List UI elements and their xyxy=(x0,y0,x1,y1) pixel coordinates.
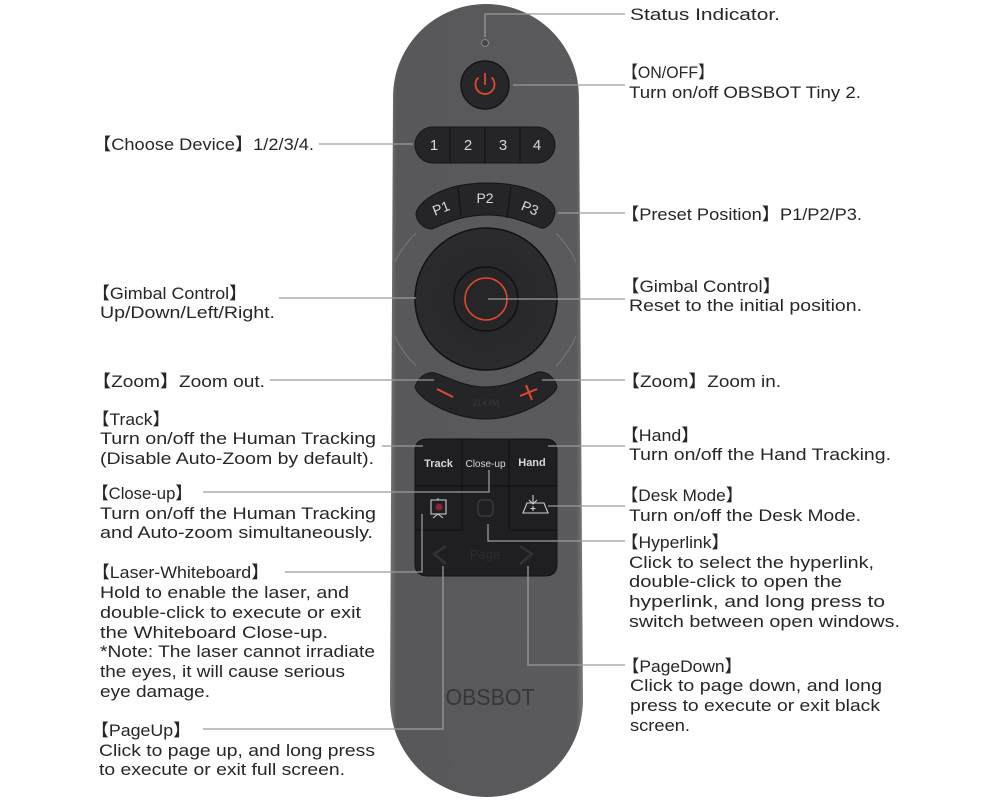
gimbal reset label: Reset to the initial position. xyxy=(629,296,862,315)
laser whiteboard label: eye damage. xyxy=(100,682,210,701)
status indicator light xyxy=(482,40,488,46)
page down label xyxy=(622,657,882,735)
laser whiteboard label xyxy=(92,563,375,701)
hyperlink label: Click to select the hyperlink, xyxy=(629,553,874,572)
desk mode label: Turn on/off the Desk Mode. xyxy=(629,506,861,525)
desk mode label: 【Desk Mode】 xyxy=(621,486,743,505)
zoom rocker xyxy=(415,372,557,419)
hyperlink label: double-click to open the xyxy=(629,572,842,591)
icon: whiteboard xyxy=(431,498,446,518)
page chevrons xyxy=(434,546,532,564)
gimbal reset button xyxy=(454,267,518,331)
laser whiteboard label: *Note: The laser cannot irradiate xyxy=(100,642,375,661)
gimbal reset label xyxy=(621,277,862,315)
close-up label: 【Close-up】 xyxy=(92,484,192,503)
function button panel: Hand xyxy=(518,457,546,469)
preset buttons P1 P2 P3: P2 xyxy=(476,190,494,206)
gimbal directions label: 【Gimbal Control】 xyxy=(92,284,247,303)
page up label: Click to page up, and long press xyxy=(99,741,375,760)
OBSBOT logo: OBSBOT xyxy=(446,684,534,710)
hand label: Turn on/off the Hand Tracking. xyxy=(629,445,891,464)
choose device label: 【Choose Device】1/2/3/4. xyxy=(93,135,314,154)
preset position label: 【Preset Position】P1/P2/P3. xyxy=(621,205,862,224)
gimbal outer ring xyxy=(395,233,576,366)
device buttons 1-4: 2 xyxy=(464,137,472,154)
device buttons 1-4 xyxy=(415,127,555,163)
function button panel: Track xyxy=(424,458,454,470)
page up label: 【PageUp】 xyxy=(91,721,191,740)
gimbal directions label: Up/Down/Left/Right. xyxy=(100,303,275,322)
icon: hyperlink xyxy=(478,500,493,516)
page down label: 【PageDown】 xyxy=(622,657,742,676)
zoom out label: 【Zoom】Zoom out. xyxy=(92,372,265,391)
gimbal control pad xyxy=(415,228,557,370)
page down label: Click to page down, and long xyxy=(630,676,882,695)
function button panel: Close-up xyxy=(465,459,506,470)
close-up label: Turn on/off the Human Tracking xyxy=(100,504,376,523)
remote control body xyxy=(390,4,583,797)
on/off label xyxy=(622,63,861,102)
laser whiteboard label: the eyes, it will cause serious xyxy=(100,662,345,681)
power button xyxy=(461,61,509,109)
device buttons 1-4: 3 xyxy=(499,137,507,154)
track label: 【Track】 xyxy=(92,410,170,429)
track label: Turn on/off the Human Tracking xyxy=(100,429,376,448)
page down label: press to execute or exit black xyxy=(630,696,881,715)
laser whiteboard label: Hold to enable the laser, and xyxy=(100,583,349,602)
hand label xyxy=(621,426,891,464)
track label xyxy=(92,410,376,468)
zoom rocker: ZOOM xyxy=(473,398,499,408)
on/off label: 【ON/OFF】 xyxy=(622,63,714,82)
preset buttons P1 P2 P3 xyxy=(416,183,555,229)
device buttons 1-4: 4 xyxy=(533,137,541,154)
status indicator label: Status Indicator. xyxy=(630,5,780,24)
preset buttons P1 P2 P3: P1 xyxy=(430,197,452,219)
track label: (Disable Auto-Zoom by default). xyxy=(100,449,374,468)
laser whiteboard label: 【Laser-Whiteboard】 xyxy=(92,563,269,582)
hyperlink label xyxy=(621,533,900,631)
preset buttons P1 P2 P3: P3 xyxy=(519,197,541,219)
close-up label xyxy=(92,484,376,542)
function button panel: Page xyxy=(470,547,500,562)
page up label xyxy=(91,721,375,779)
hyperlink label: 【Hyperlink】 xyxy=(621,533,729,552)
function button panel xyxy=(415,439,557,576)
gimbal directions label xyxy=(92,284,275,322)
laser whiteboard label: the Whiteboard Close-up. xyxy=(100,623,328,642)
device buttons 1-4: 1 xyxy=(430,137,438,154)
laser whiteboard label: double-click to execute or exit xyxy=(100,603,361,622)
leader lines xyxy=(203,14,625,729)
right labels xyxy=(621,5,900,735)
zoom in label: 【Zoom】Zoom in. xyxy=(621,372,781,391)
on/off label: Turn on/off OBSBOT Tiny 2. xyxy=(629,83,861,102)
page down label: screen. xyxy=(630,716,690,735)
hand label: 【Hand】 xyxy=(621,426,699,445)
desk mode label xyxy=(621,486,861,525)
hyperlink label: switch between open windows. xyxy=(629,612,900,631)
icon: desk mode xyxy=(523,495,548,513)
page up label: to execute or exit full screen. xyxy=(99,760,345,779)
close-up label: and Auto-zoom simultaneously. xyxy=(100,523,373,542)
hyperlink label: hyperlink, and long press to xyxy=(629,592,885,611)
gimbal reset label: 【Gimbal Control】 xyxy=(621,277,781,296)
left labels xyxy=(91,135,376,779)
